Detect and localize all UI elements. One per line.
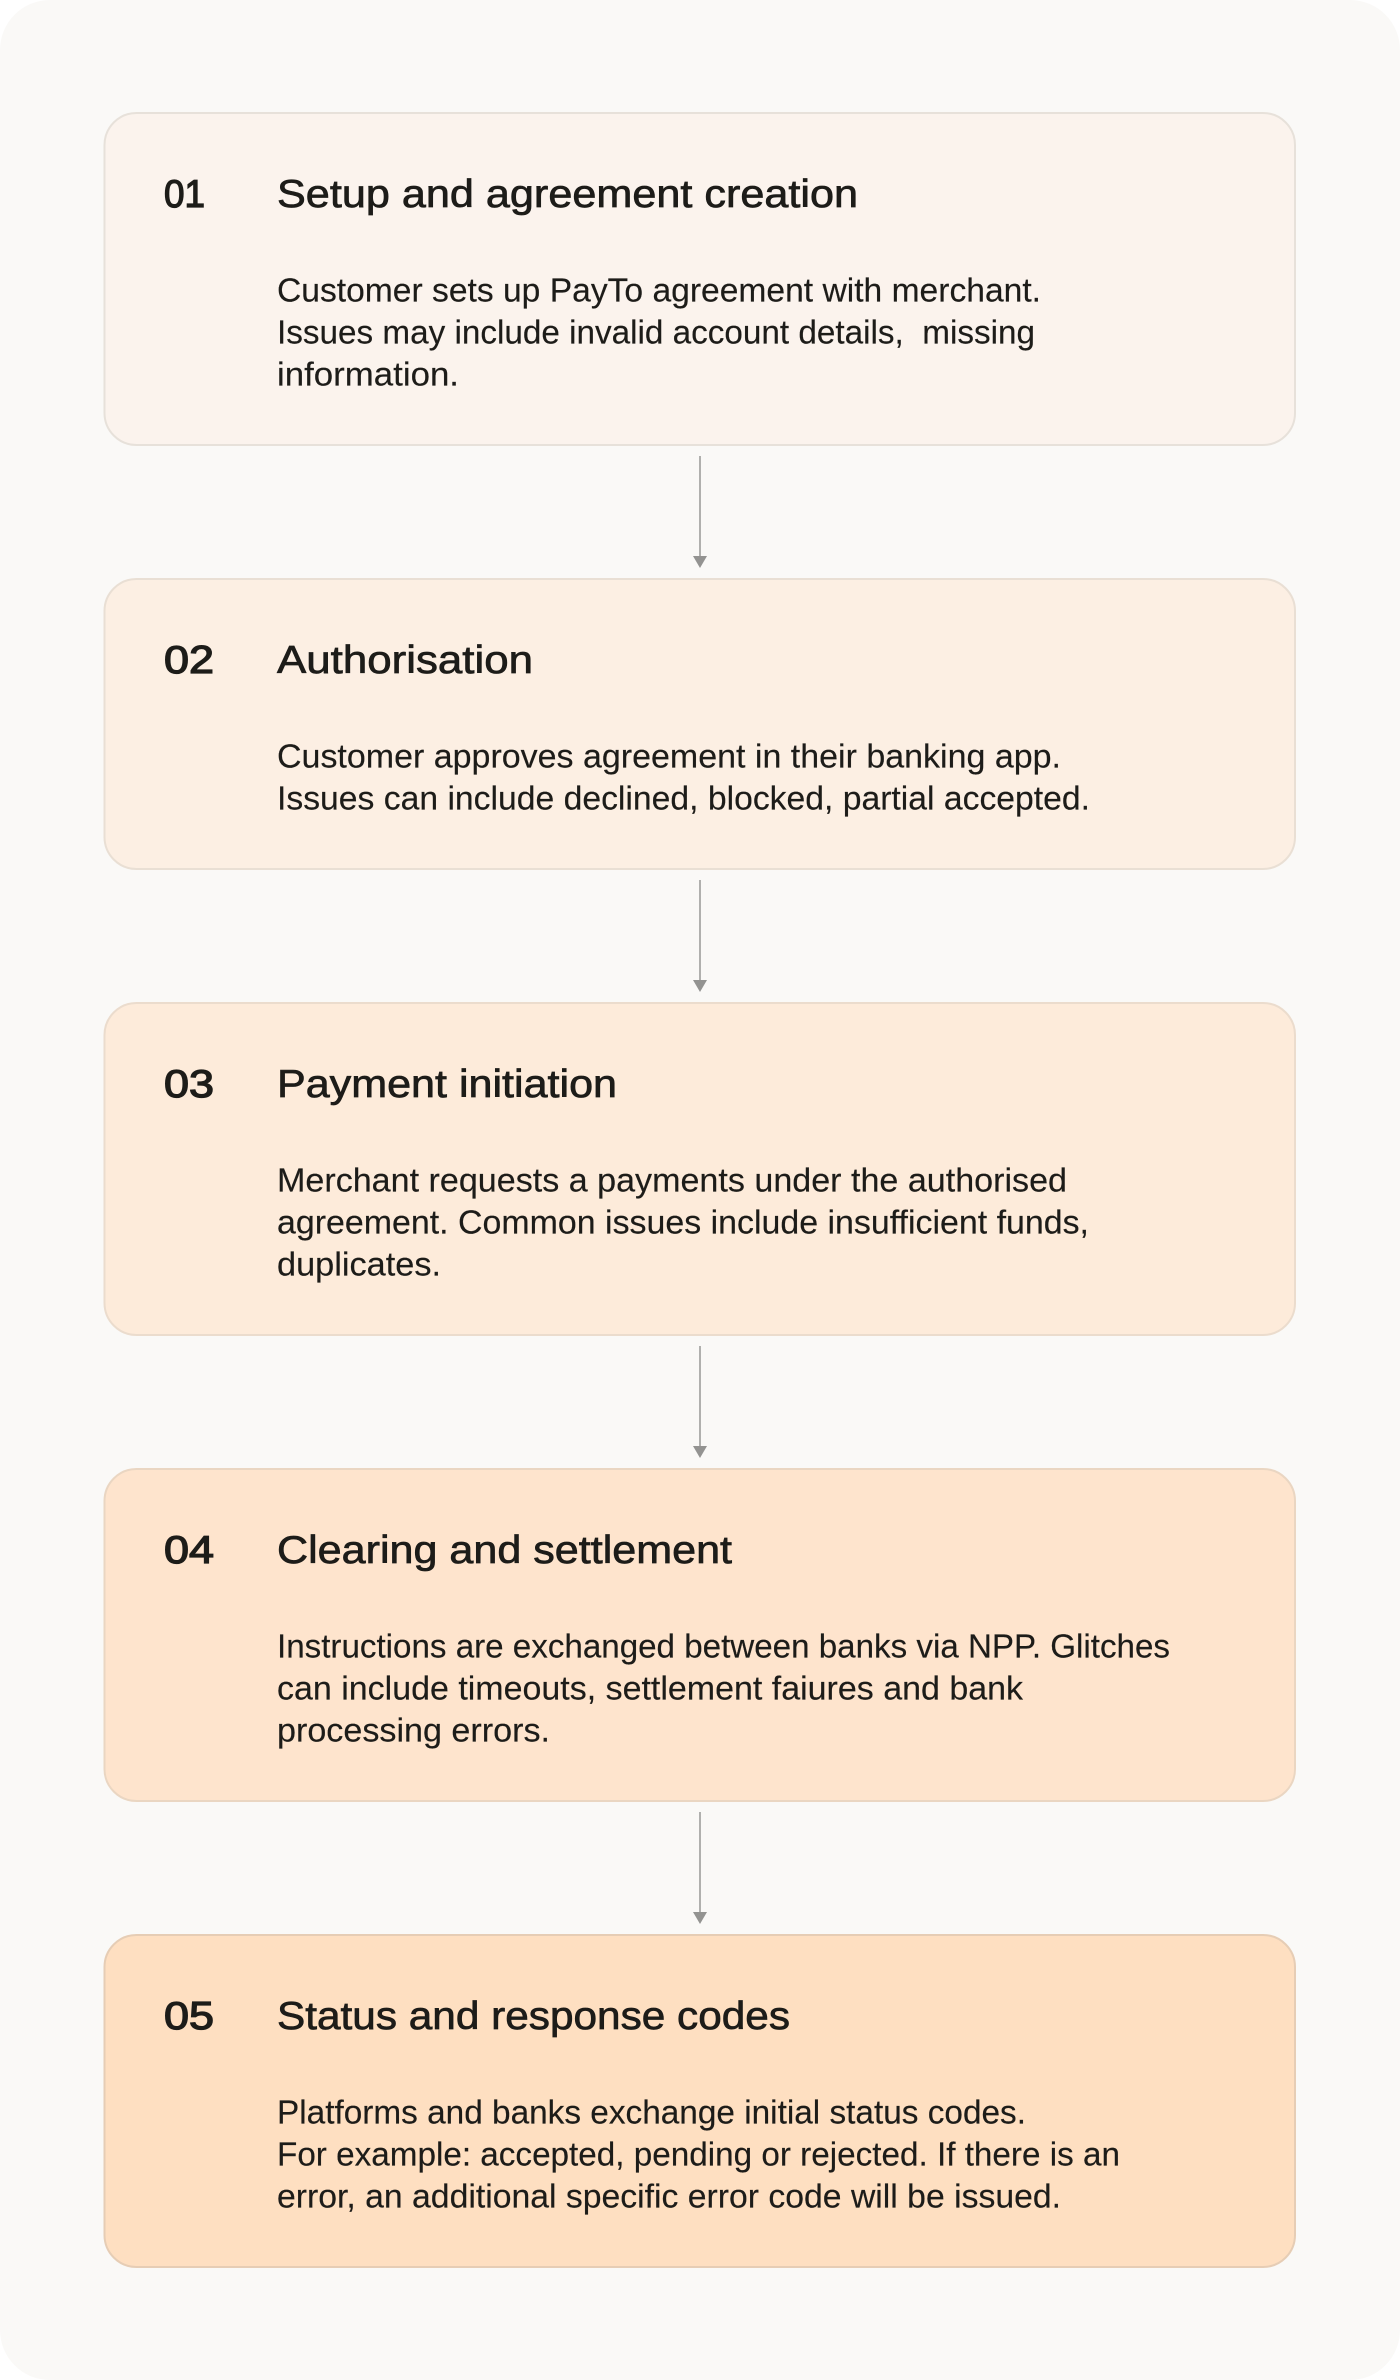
body text: processing errors. [277,1712,550,1748]
panel: step 01 [104,113,1295,445]
card background [104,1469,1295,1801]
body text [277,1628,1170,1748]
step number: 04 [164,1529,214,1572]
card background [104,1003,1295,1335]
arrow: step 01 to 02 [693,456,707,568]
body text: Instructions are exchanged between banks via NPP. Glitches [277,1628,1170,1664]
panel: step 03 [104,1003,1295,1335]
body text [277,272,1041,392]
body text: Platforms and banks exchange initial status codes. [277,2094,1026,2130]
heading: Clearing and settlement [277,1529,732,1572]
body text: can include timeouts, settlement faiures and bank [277,1670,1024,1706]
body text: information. [277,356,459,392]
body text: Issues may include invalid account details, missing [277,314,1035,350]
card background [104,1935,1295,2267]
heading: Setup and agreement creation [277,173,858,216]
card background [104,579,1295,869]
arrow: step 02 to 03 [693,880,707,992]
body text: error, an additional specific error code will be issued. [277,2178,1061,2214]
step number: 02 [164,639,214,682]
panel: step 02 [104,579,1295,869]
arrow: step 03 to 04 [693,1346,707,1458]
panel: step 05 [104,1935,1295,2267]
step number: 03 [164,1063,214,1106]
body text: Merchant requests a payments under the authorised [277,1162,1067,1198]
step number: 05 [164,1995,214,2038]
heading: Authorisation [277,639,533,682]
panel: step 04 [104,1469,1295,1801]
card background [104,113,1295,445]
body text: For example: accepted, pending or rejected. If there is an [277,2136,1120,2172]
body text [277,2094,1120,2214]
body text: duplicates. [277,1246,441,1282]
body text [277,1162,1089,1282]
heading: Payment initiation [277,1063,617,1106]
step number: 01 [164,173,205,216]
body text: Customer approves agreement in their banking app. [277,738,1061,774]
body text: Issues can include declined, blocked, partial accepted. [277,780,1090,816]
body text: agreement. Common issues include insufficient funds, [277,1204,1089,1240]
arrow: step 04 to 05 [693,1812,707,1924]
body text [277,738,1090,816]
heading: Status and response codes [277,1995,790,2038]
body text: Customer sets up PayTo agreement with merchant. [277,272,1041,308]
